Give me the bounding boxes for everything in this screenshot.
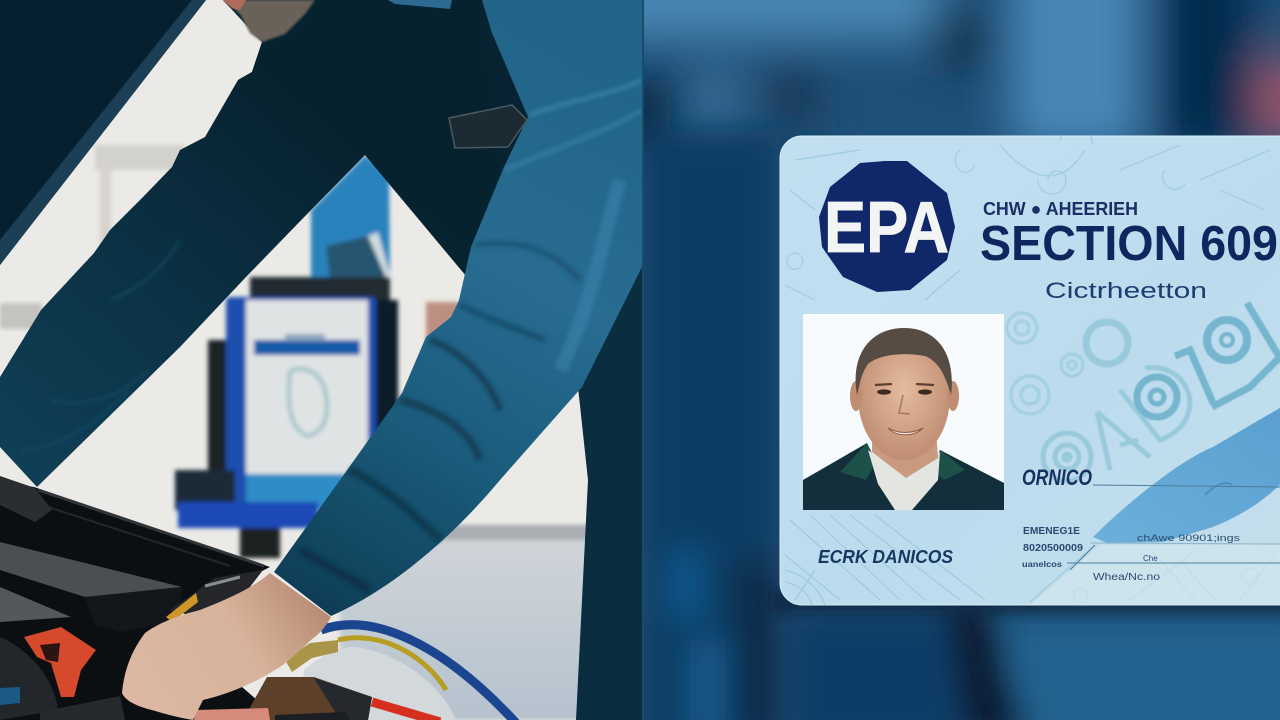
card detail lines: Whea/Nc.no xyxy=(1093,572,1161,583)
garage background xyxy=(0,0,642,720)
card header line: CHW ● AHEERIEH xyxy=(983,199,1138,219)
card detail lines: chAwe 90901;ings xyxy=(1137,533,1240,544)
mechanic neck and beard xyxy=(223,0,452,42)
mechanic legs xyxy=(576,260,642,720)
card subtitle: Cictrheetton xyxy=(1045,278,1207,303)
panel: mechanic working under the hood xyxy=(0,0,642,720)
nose xyxy=(899,395,910,414)
card detail lines: 8020500009 xyxy=(1023,542,1083,554)
blue swoosh xyxy=(1093,405,1280,543)
card detail lines: EMENEG1E xyxy=(1023,525,1080,537)
hair xyxy=(856,328,952,395)
jacket xyxy=(803,443,1004,510)
card detail lines xyxy=(1022,525,1240,583)
mechanic arm: forearm reaching engine xyxy=(274,0,642,616)
panel: EPA Section 609 certification card xyxy=(780,128,1280,605)
hoses and service gauge xyxy=(194,625,517,720)
chest pocket tab xyxy=(449,105,527,148)
pale lower card area xyxy=(1030,545,1280,605)
holder photo xyxy=(803,314,1004,510)
shirt collar xyxy=(868,450,940,510)
signature rules xyxy=(1067,485,1280,570)
card detail lines: uanelcos xyxy=(1022,560,1063,569)
security pattern xyxy=(785,128,1275,605)
neck xyxy=(872,440,938,478)
card name label: ORNICO xyxy=(1022,465,1092,490)
mechanic torso xyxy=(223,0,528,274)
head xyxy=(859,354,950,460)
mechanic arm: upper left sleeve xyxy=(0,42,465,487)
recovery machine xyxy=(175,155,398,558)
mechanic hand xyxy=(122,573,331,720)
sleeve folds xyxy=(96,240,180,408)
eyes xyxy=(877,389,891,395)
holder name: ECRK DANICOS xyxy=(818,547,953,567)
car hood xyxy=(0,0,206,265)
EPA logo xyxy=(819,161,955,292)
divider strip xyxy=(642,0,644,720)
swirl watermark xyxy=(1007,303,1280,481)
engine bay xyxy=(0,476,280,720)
panel: blurred blue background xyxy=(600,0,1280,720)
logo wordmark: EPA xyxy=(824,188,949,268)
card detail lines: Che xyxy=(1143,554,1158,563)
card shadow xyxy=(770,590,1280,614)
smile xyxy=(888,428,923,435)
